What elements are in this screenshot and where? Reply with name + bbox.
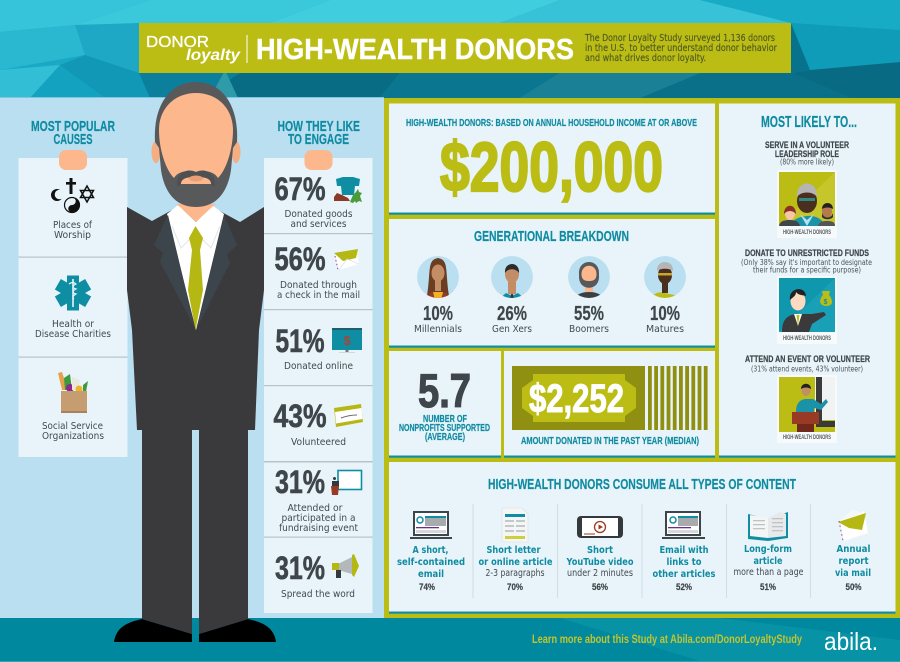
stat: matures: 10% <box>650 303 680 325</box>
item: short letter: Short letter <box>486 545 541 556</box>
item: annual report: report <box>838 556 869 567</box>
picture card: donor with money bag <box>777 276 837 344</box>
item: annual report: via mail <box>835 568 871 579</box>
left light blue panel <box>0 98 384 618</box>
shoes <box>114 619 192 642</box>
stat: 67% donated goods <box>274 171 362 230</box>
heading: how they like to engage <box>278 118 360 148</box>
title banner <box>139 23 791 73</box>
study description: and what drives donor loyalty. <box>585 53 706 64</box>
face <box>159 93 233 178</box>
item: short letter: 70% <box>507 582 523 593</box>
label: health or disease charities: Health or <box>52 319 95 330</box>
stat: 43% volunteered: Volunteered <box>291 437 346 448</box>
panel: generational breakdown <box>389 219 715 348</box>
label: social service organizations <box>42 421 104 442</box>
item: annual report: Annual <box>836 544 870 555</box>
item: email with links: Email with <box>660 545 708 556</box>
label: social service organizations: Social Service <box>42 421 103 432</box>
icon: document <box>502 508 528 542</box>
title: HIGH-WEALTH DONORS <box>256 34 574 66</box>
stat: 31% fundraising event: 31% <box>275 464 325 500</box>
logo: donor loyalty: loyalty <box>186 47 242 64</box>
item: annual report <box>835 510 871 593</box>
panel: nonprofits supported <box>389 351 501 458</box>
icon: phone video <box>577 516 623 538</box>
item: attend event or volunteer <box>745 354 870 443</box>
icon: religious symbols <box>51 178 94 212</box>
nonprofits caption <box>399 414 490 443</box>
item: unrestricted funds: (Only 38% say it's important to designate <box>741 258 872 267</box>
stat: matures: Matures <box>646 324 684 335</box>
panel: income threshold <box>389 104 715 215</box>
icon: laptop <box>410 511 452 539</box>
income figure: $200,000 <box>440 128 663 206</box>
icon: monitor: $ <box>344 333 352 348</box>
nonprofits caption: NONPROFITS SUPPORTED <box>399 423 490 434</box>
item: long-form article: article <box>754 556 783 567</box>
item: long-form article: Long-form <box>744 544 792 555</box>
stat: 51% donated online: Donated online <box>284 361 353 372</box>
item: short video: Short <box>587 545 613 556</box>
stat: 31% spread the word: Spread the word <box>281 589 355 600</box>
tie <box>188 226 203 330</box>
icon: name tag <box>334 404 363 427</box>
item: volunteer leadership: LEADERSHIP ROLE <box>775 149 839 160</box>
avatar: boomers <box>568 256 610 300</box>
stat: millennials <box>414 303 462 335</box>
label: places of worship: Places of <box>53 220 92 231</box>
panel: content types <box>389 462 896 614</box>
stat: 43% volunteered: 43% <box>274 398 326 434</box>
stat: 56% check in the mail: Donated through <box>280 280 357 291</box>
item: short letter <box>478 508 553 593</box>
avatar: gen xers <box>491 256 533 300</box>
stat: 67% donated goods: Donated goods <box>284 209 352 220</box>
item: attend event or volunteer: (31% attend events, 43% volunteer) <box>751 364 863 374</box>
abila logo: abila. <box>824 628 878 656</box>
panel: most likely to <box>719 104 896 458</box>
icon: envelope <box>838 510 868 541</box>
item: short email: self-contained <box>397 557 465 568</box>
heading: most popular causes: MOST POPULAR <box>31 118 115 135</box>
nonprofits caption: (AVERAGE) <box>425 432 465 443</box>
stat: 67% donated goods: and services <box>290 219 346 230</box>
stat: 31% fundraising event: participated in a <box>282 513 356 524</box>
thumb holding engage card <box>304 150 332 170</box>
heading: generational breakdown: GENERATIONAL BREAKDOWN <box>474 228 629 245</box>
footer link text: Learn more about this Study at Abila.com/DonorLoyaltyStudy <box>532 632 802 646</box>
heading: most popular causes <box>31 118 115 148</box>
number: 5.7: 5.7 <box>418 364 471 417</box>
icon: bill with cash stack <box>512 366 708 430</box>
stat: 31% fundraising event: Attended or <box>288 503 343 514</box>
panel: amount donated <box>504 351 715 458</box>
label: places of worship: Worship <box>54 230 91 241</box>
income subheading: HIGH-WEALTH DONORS: BASED ON ANNUAL HOUSEHOLD INCOME AT OR ABOVE <box>406 117 697 129</box>
stat: millennials: 10% <box>423 303 453 325</box>
picture card: donor with money bag: HIGH-WEALTH DONORS <box>783 336 831 342</box>
icon: presenter and screen <box>331 470 362 495</box>
hair and beard <box>155 82 237 207</box>
heading: most popular causes: CAUSES <box>54 131 92 148</box>
stat: gen xers: Gen Xers <box>492 324 532 335</box>
nonprofits caption: NUMBER OF <box>423 414 467 425</box>
avatar: millennials <box>417 256 459 300</box>
stat: matures <box>646 303 684 335</box>
neck <box>176 204 216 222</box>
figure: businessman <box>114 82 276 642</box>
item: annual report: 50% <box>846 582 862 593</box>
avatar: matures <box>644 256 686 300</box>
stat: boomers: 55% <box>574 303 604 325</box>
stat: 51% donated online <box>276 323 362 372</box>
item: short email <box>397 511 465 593</box>
amount caption: AMOUNT DONATED IN THE PAST YEAR (MEDIAN) <box>521 435 699 447</box>
stat: 56% check in the mail <box>274 241 360 301</box>
item: unrestricted funds: their funds for a specific purpose) <box>753 266 861 274</box>
item: email with links <box>652 511 716 593</box>
item: long-form article: 51% <box>760 582 776 593</box>
shirt <box>167 205 224 330</box>
item: volunteer leadership: SERVE IN A VOLUNTEER <box>765 140 849 151</box>
heading: how they like to engage: HOW THEY LIKE <box>278 118 360 135</box>
picture card: leadership team: HIGH-WEALTH DONORS <box>783 230 831 236</box>
stat: gen xers: 26% <box>497 303 527 325</box>
item: email with links: other articles <box>652 569 716 580</box>
item: short letter: 2-3 paragraphs <box>486 568 545 579</box>
ears <box>152 141 160 163</box>
stat: 31% spread the word <box>275 550 359 600</box>
trousers and jacket <box>142 430 248 634</box>
panel: most popular causes <box>18 118 128 457</box>
lapels <box>154 215 195 328</box>
label: places of worship <box>53 220 92 241</box>
olive frame <box>384 98 900 618</box>
panel: how they like to engage <box>59 118 372 613</box>
item: email with links: 52% <box>676 582 692 593</box>
item: short email: 74% <box>419 582 435 593</box>
item: volunteer leadership: (80% more likely) <box>780 158 834 166</box>
logo: donor loyalty <box>146 34 242 64</box>
icon: open book <box>748 512 788 541</box>
label: health or disease charities: Disease Charities <box>35 329 111 340</box>
moustache and lip <box>177 171 215 186</box>
item: short video: YouTube video <box>566 557 634 568</box>
thumb holding causes card <box>59 150 87 170</box>
stat: 56% check in the mail: 56% <box>274 241 326 277</box>
stat: 31% fundraising event: fundraising event <box>279 523 358 534</box>
item: long-form article: more than a page <box>734 567 804 578</box>
icon: grocery bag <box>58 372 88 413</box>
stat: 67% donated goods: 67% <box>274 171 326 207</box>
icon: envelope <box>334 249 359 270</box>
item: short email: email <box>418 569 444 580</box>
stat: 31% spread the word: 31% <box>275 550 325 586</box>
label: health or disease charities <box>35 319 111 340</box>
stat: 56% check in the mail: a check in the mail <box>277 290 360 301</box>
stat: millennials: Millennials <box>414 324 462 335</box>
icon: laptop <box>662 511 705 539</box>
item: volunteer leadership <box>765 140 849 238</box>
item: long-form article <box>734 512 804 593</box>
header polygon background <box>0 0 900 99</box>
icon: star of life <box>55 276 91 310</box>
amount: $2,252: $2,252 <box>529 377 624 421</box>
icon: megaphone <box>332 554 359 578</box>
stat: boomers <box>569 303 609 335</box>
label: social service organizations: Organizations <box>42 431 104 442</box>
item: unrestricted funds <box>741 248 872 344</box>
stat: boomers: Boomers <box>569 324 609 335</box>
item: short video: 56% <box>592 582 608 593</box>
item: short video <box>566 516 634 593</box>
item: email with links: links to <box>666 557 702 568</box>
item: short email: A short, <box>412 545 448 556</box>
logo: donor loyalty: DONOR <box>146 34 209 51</box>
item: short letter: or online article <box>478 557 553 568</box>
heading: how they like to engage: TO ENGAGE <box>288 131 349 148</box>
icon: clothes and toys <box>334 177 362 203</box>
stat: gen xers <box>492 303 532 335</box>
footer band <box>0 618 900 662</box>
picture card: speaker at podium: HIGH-WEALTH DONORS <box>783 435 831 441</box>
picture card: donor with money bag: $ <box>824 299 828 306</box>
stat: 43% volunteered <box>274 398 363 448</box>
stat: 51% donated online: 51% <box>276 323 324 359</box>
item: short video: under 2 minutes <box>567 568 633 579</box>
study description: in the U.S. to better understand donor behavior <box>585 43 777 54</box>
study description: The Donor Loyalty Study surveyed 1,136 donors <box>584 33 775 44</box>
stat: 31% fundraising event <box>275 464 362 534</box>
study description <box>584 33 777 64</box>
